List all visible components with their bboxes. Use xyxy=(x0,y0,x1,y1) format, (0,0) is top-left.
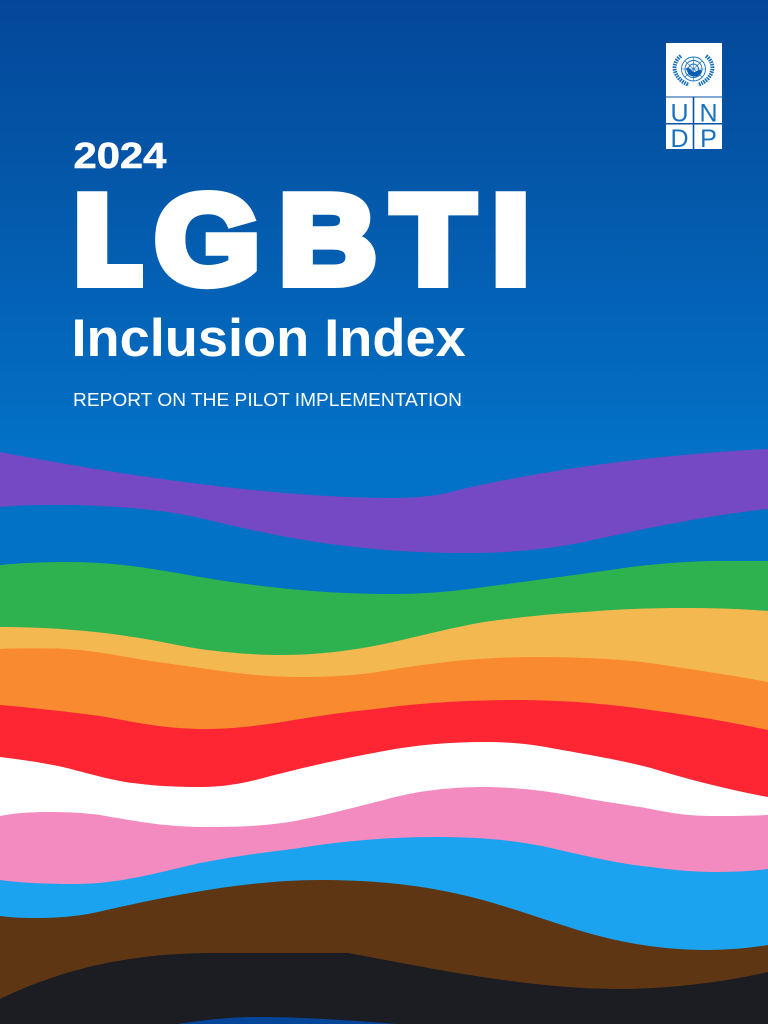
band: red xyxy=(0,700,768,1024)
logo: letter P: P xyxy=(700,125,717,153)
logo: UN emblem xyxy=(675,56,712,85)
logo: letter D: D xyxy=(670,125,689,153)
year: 2024 xyxy=(74,137,167,176)
band: brown xyxy=(0,880,768,1024)
report line: REPORT ON THE PILOT IMPLEMENTATION xyxy=(73,389,462,410)
band: pink xyxy=(0,787,768,1024)
band: orange xyxy=(0,648,768,1024)
band: green xyxy=(0,561,768,1024)
logo: letter N: N xyxy=(699,100,718,128)
UNDP logo xyxy=(666,43,722,153)
subtitle: Inclusion Index: Inclusion Index xyxy=(72,309,466,368)
band: yellow xyxy=(0,608,768,1024)
main title: LGBTI: LGBTI xyxy=(74,169,529,310)
logo: emblem tile xyxy=(666,43,722,96)
band: white xyxy=(0,742,768,1024)
logo: letter U: U xyxy=(670,100,689,128)
bottom blue arc xyxy=(178,1017,396,1024)
band: near-black xyxy=(0,953,768,1024)
band: blue xyxy=(0,505,768,1024)
band: purple xyxy=(0,449,768,1024)
band: light blue xyxy=(0,837,768,1024)
